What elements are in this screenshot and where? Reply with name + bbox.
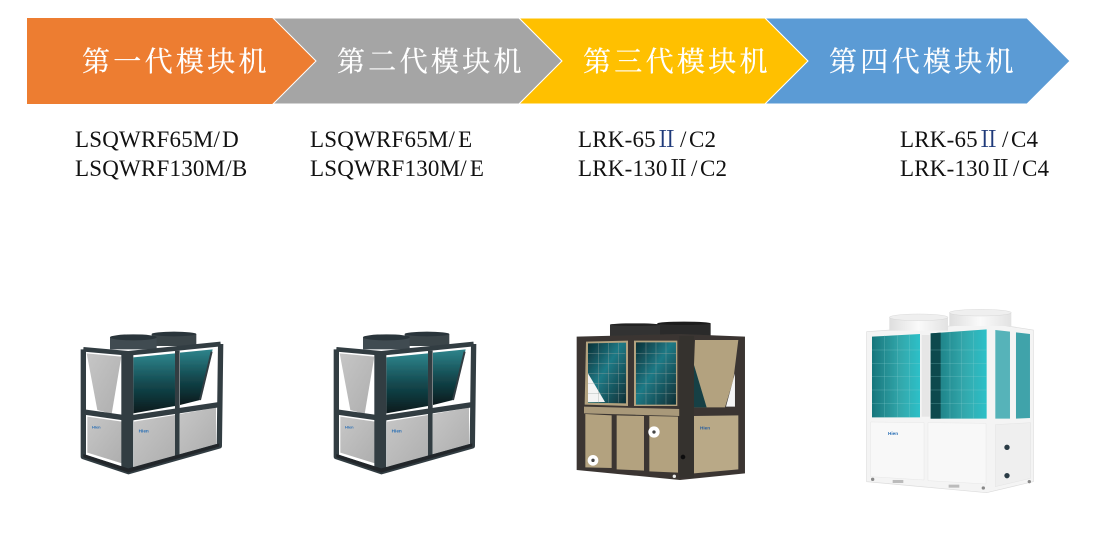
product image: first generation unit: Hien (92, 424, 101, 429)
product image: fourth generation unit (867, 309, 1033, 493)
product image: third generation unit: Hien (700, 425, 710, 430)
arrow: first generation: 第一代模块机 (82, 46, 270, 78)
model list: second generation: LSQWRF65M/E (310, 127, 472, 152)
model list: first generation: LSQWRF130M/B (75, 156, 247, 181)
arrow: third generation (519, 18, 808, 104)
product image: fourth generation unit: Hien (888, 431, 898, 436)
product image: second generation unit: Hien (392, 429, 402, 434)
model list: third generation: Ⅱ (655, 127, 678, 152)
arrow: fourth generation: 第四代模块机 (829, 46, 1017, 78)
arrow: second generation (273, 18, 562, 104)
model list: third generation: / (680, 127, 687, 152)
model list: fourth generation (900, 127, 1050, 181)
process arrow chain (27, 18, 1070, 104)
model list: first generation (75, 127, 247, 181)
model list: fourth generation: / (1013, 156, 1020, 181)
model list: third generation: LRK-65 (578, 127, 656, 152)
model list: second generation: LSQWRF130M/E (310, 156, 484, 181)
model list: third generation: C2 (700, 156, 727, 181)
model list: fourth generation: C4 (1022, 156, 1050, 181)
model list: second generation (310, 127, 484, 181)
arrow: fourth generation (765, 18, 1070, 104)
product image: first generation unit: Hien (139, 429, 149, 434)
product image: second generation unit: Hien (345, 424, 354, 429)
arrow: third generation: 第三代模块机 (583, 46, 771, 78)
model list: fourth generation: C4 (1011, 127, 1039, 152)
arrow: second generation: 第二代模块机 (337, 46, 525, 78)
model list: fourth generation: Ⅱ (989, 156, 1012, 181)
model list: fourth generation: LRK-130 (900, 156, 990, 181)
product image: second generation unit (336, 332, 474, 473)
model list: first generation: LSQWRF65M/D (75, 127, 239, 152)
model list: third generation: Ⅱ (667, 156, 690, 181)
product image: first generation unit (83, 332, 221, 473)
model list: third generation (578, 127, 727, 181)
arrow: first generation (27, 18, 316, 104)
model list: fourth generation: / (1002, 127, 1009, 152)
model list: fourth generation: LRK-65 (900, 127, 978, 152)
model list: third generation: / (691, 156, 698, 181)
model list: third generation: LRK-130 (578, 156, 668, 181)
product image: third generation unit (577, 322, 745, 480)
model list: third generation: C2 (689, 127, 716, 152)
model list: fourth generation: Ⅱ (977, 127, 1000, 152)
